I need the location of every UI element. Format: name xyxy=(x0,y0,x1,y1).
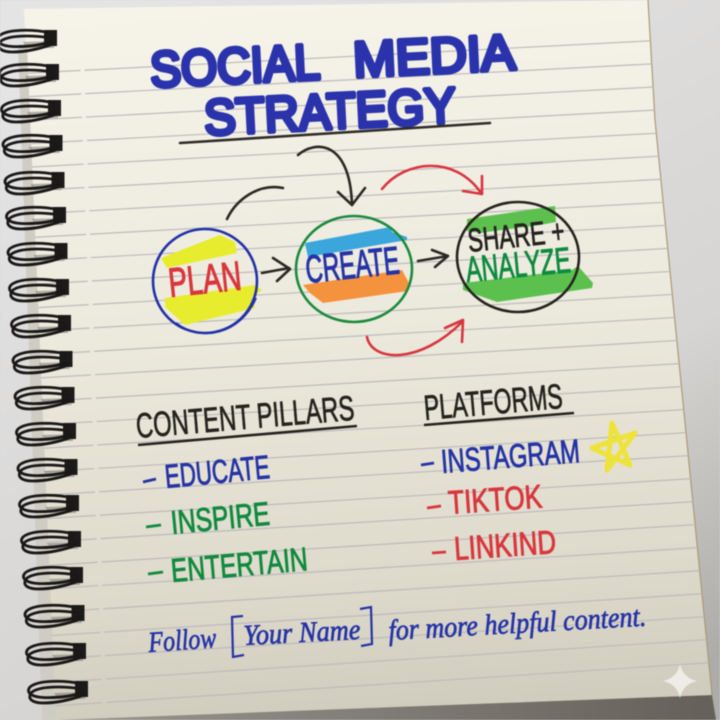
footer call to action: Follow xyxy=(146,622,218,659)
footer call to action: Your Name xyxy=(243,614,361,652)
list: platforms: LINKIND xyxy=(453,523,557,567)
title: SOCIAL xyxy=(149,34,321,98)
heading: platforms xyxy=(422,377,574,428)
heading: platforms: PLATFORMS xyxy=(422,377,564,428)
step: share and analyze: ANALYZE xyxy=(464,239,572,290)
arrow: into create xyxy=(298,147,365,205)
arrow: red bottom xyxy=(367,320,463,355)
title: STRATEGY xyxy=(203,77,457,146)
list: platforms: INSTAGRAM xyxy=(440,432,581,480)
icon: sparkle watermark xyxy=(663,664,697,698)
list: content pillars: EDUCATE xyxy=(163,448,271,495)
step: share and analyze xyxy=(457,202,593,312)
arrow: plan curve xyxy=(227,187,283,219)
step: plan: PLAN xyxy=(166,253,244,306)
list: platforms: TIKTOK xyxy=(447,478,543,521)
arrow: plan to create xyxy=(262,258,290,281)
footer call to action xyxy=(146,601,647,659)
list: platforms xyxy=(421,432,581,567)
step: create xyxy=(296,216,412,322)
list: content pillars: INSPIRE xyxy=(169,495,271,541)
title: MEDIA xyxy=(352,24,517,88)
heading: content pillars xyxy=(134,389,357,446)
arrow: red top xyxy=(382,166,482,194)
title xyxy=(149,24,517,146)
title underline xyxy=(180,123,490,143)
step: share and analyze: SHARE + xyxy=(466,212,566,259)
arrow: create to share xyxy=(418,250,448,267)
list: content pillars xyxy=(143,448,309,589)
heading: content pillars: CONTENT PILLARS xyxy=(134,389,356,446)
icon: yellow star xyxy=(592,423,635,470)
footer call to action: for more helpful content. xyxy=(388,601,647,647)
step: create: CREATE xyxy=(303,239,401,292)
spiral binding xyxy=(0,30,88,703)
page shadow xyxy=(40,695,716,720)
spine strip xyxy=(18,45,56,720)
step: plan xyxy=(153,229,262,333)
list: content pillars: ENTERTAIN xyxy=(169,540,309,589)
